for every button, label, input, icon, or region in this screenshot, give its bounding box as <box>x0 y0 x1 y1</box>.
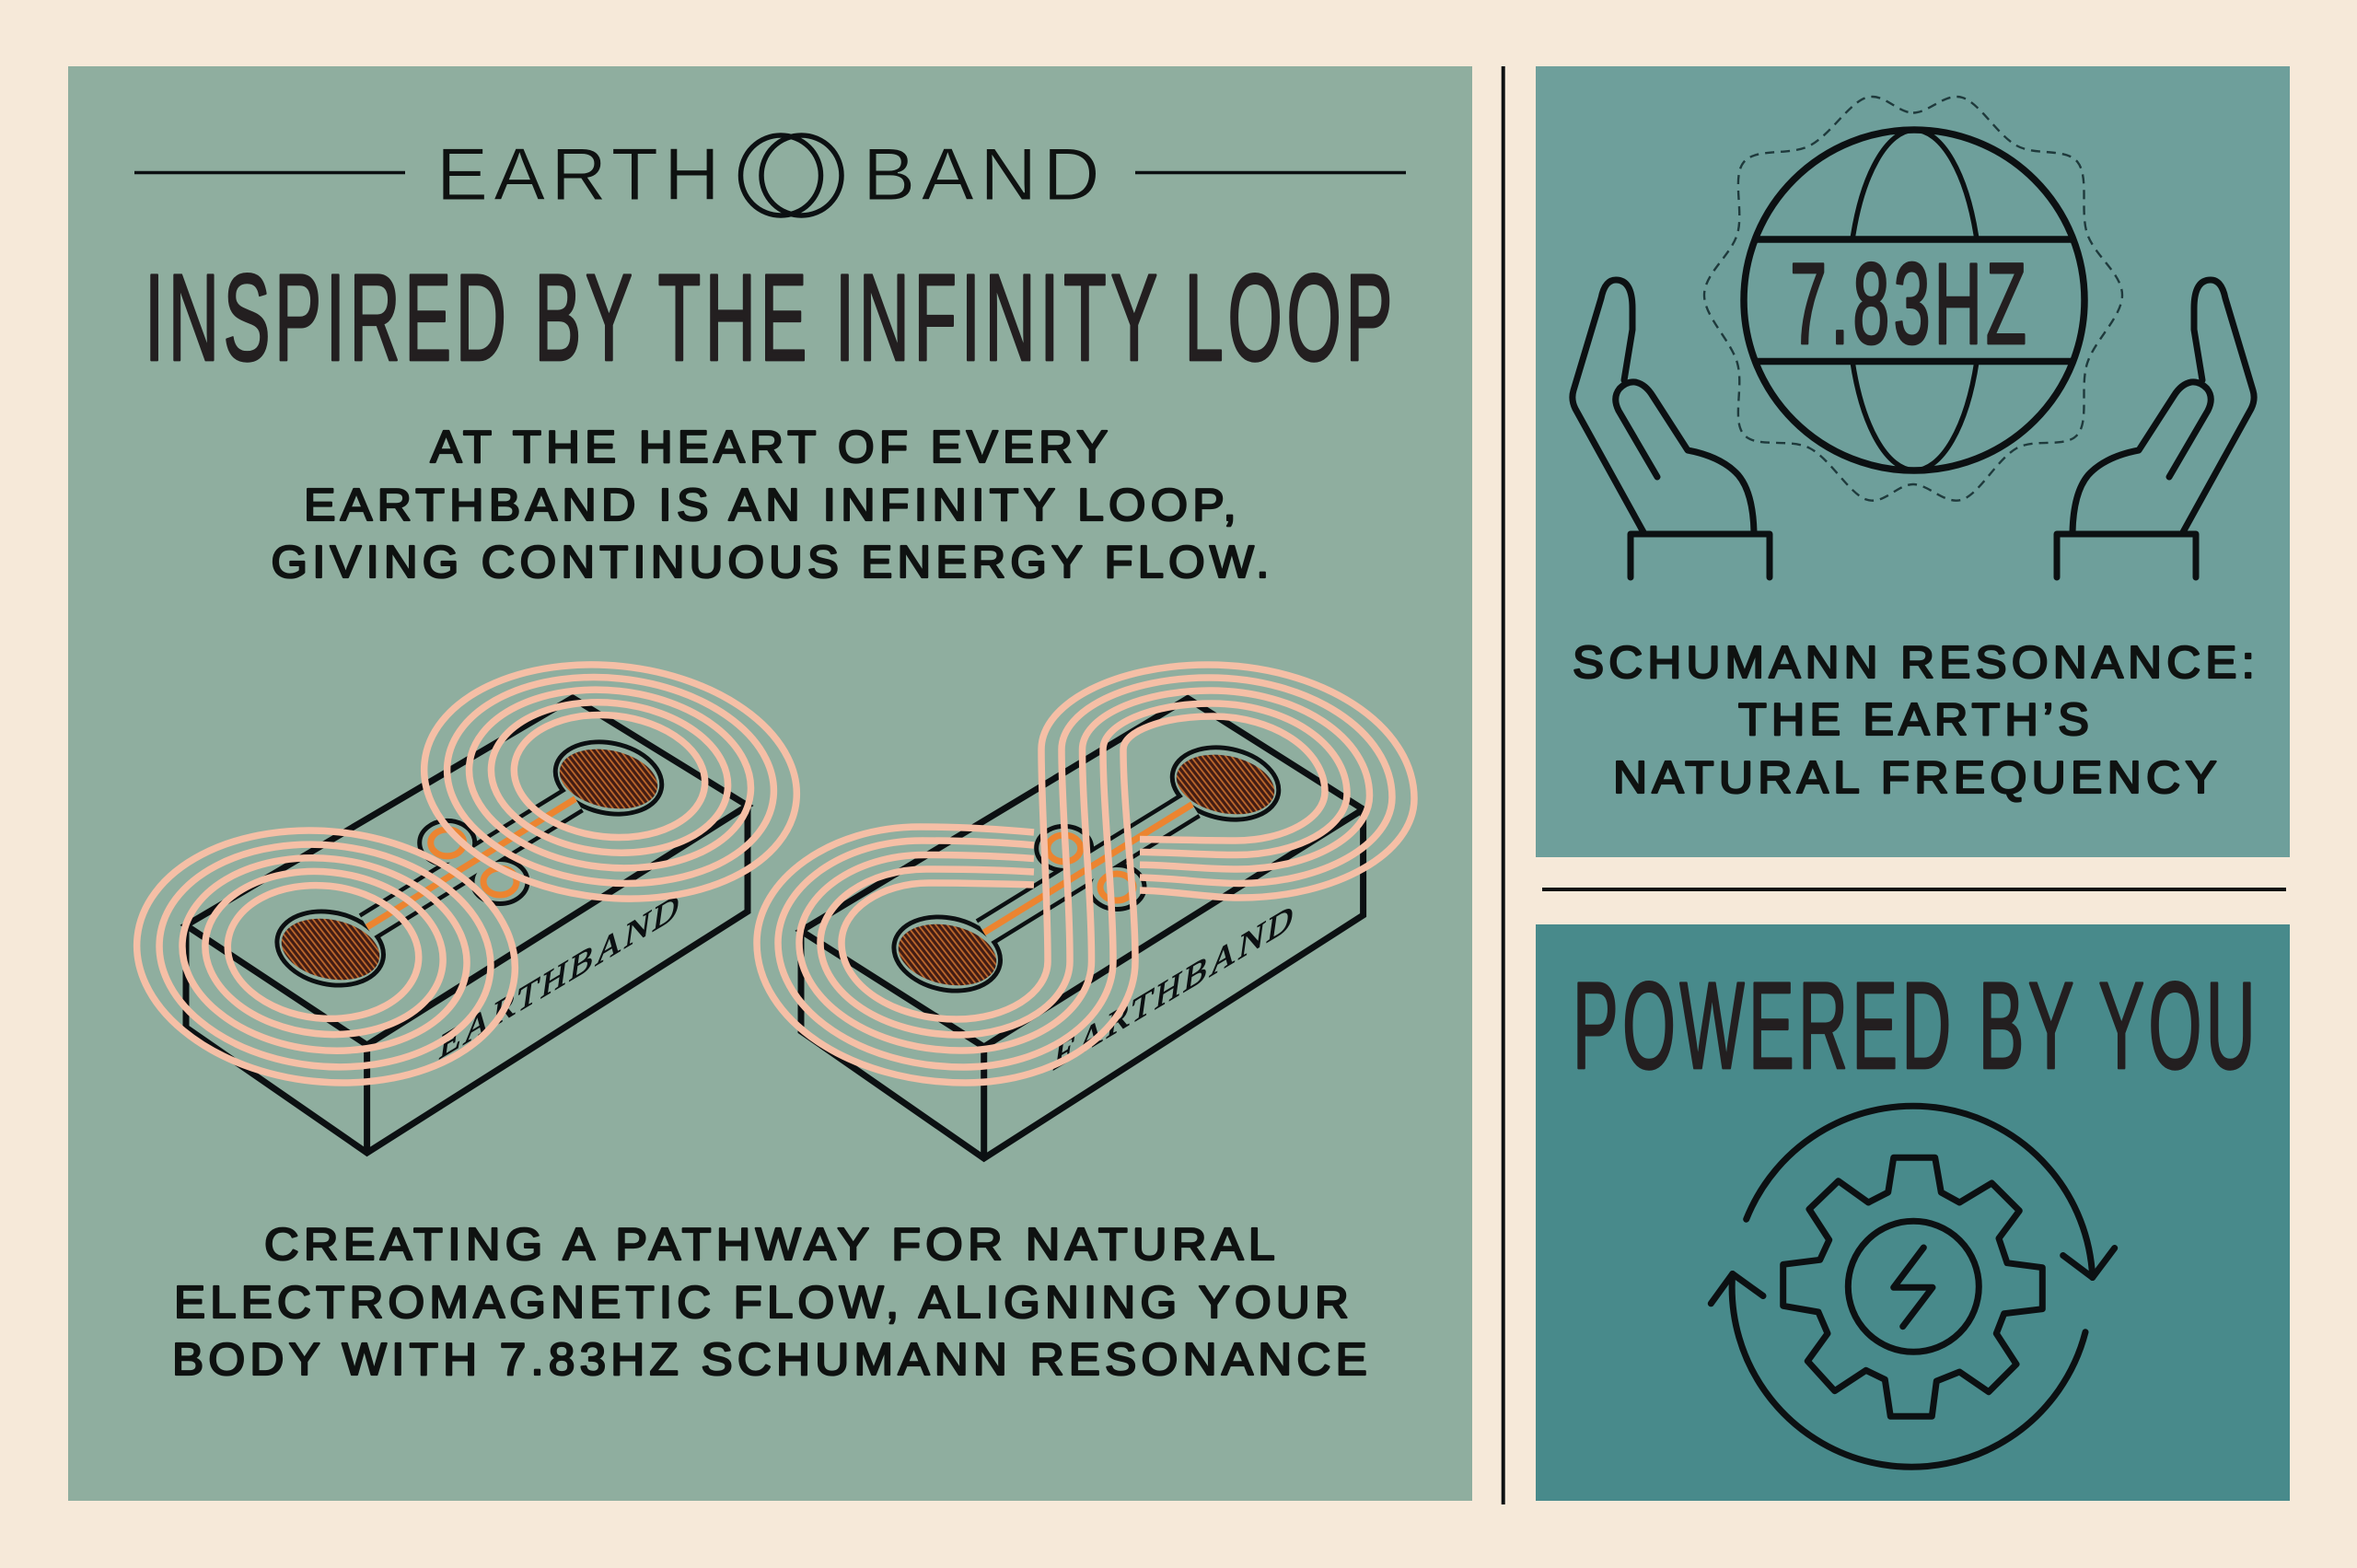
box label: EARTHBAND: EARTHBAND <box>1051 893 1299 1079</box>
field rings: two separate coils <box>124 646 808 1101</box>
text block: intro: EARTHBAND IS AN INFINITY LOOP, <box>304 481 1241 530</box>
icon: left hand <box>1573 280 1770 577</box>
circuit: pads and trace <box>268 730 670 997</box>
text block: closing statement <box>172 1220 1372 1385</box>
logo: Earthband header: BAND <box>863 134 1106 216</box>
panel: infinity loop <box>68 66 1472 1501</box>
text block: closing statement: BODY WITH 7.83HZ SCHUMANN RESONANCE <box>172 1335 1372 1385</box>
icon: globe <box>1744 130 2084 470</box>
text block: intro: GIVING CONTINUOUS ENERGY FLOW. <box>271 538 1274 587</box>
divider: vertical <box>1502 66 1505 1504</box>
heading: inspired by the infinity loop: INSPIRED BY THE INFINITY LOOP <box>145 250 1397 387</box>
text block: Schumann resonance caption: THE EARTH’S <box>1738 695 2094 745</box>
text block: closing statement: CREATING A PATHWAY FOR NATURAL <box>264 1220 1280 1270</box>
box label: EARTHBAND: EARTHBAND <box>437 882 685 1068</box>
circuit: pads and trace <box>885 736 1287 1003</box>
illustration: earthband with separate fields <box>124 646 808 1153</box>
globe label: 7.83HZ: 7.83HZ <box>1790 240 2030 368</box>
text block: intro <box>271 423 1274 587</box>
illustration: earthband with infinity field <box>757 665 1414 1158</box>
divider: horizontal <box>1542 888 2286 891</box>
text block: Schumann resonance caption <box>1573 638 2259 803</box>
panel: Schumann resonance <box>1536 66 2290 857</box>
logo: Earthband header: EARTH <box>436 134 726 216</box>
text block: intro: AT THE HEART OF EVERY <box>431 423 1112 472</box>
panel: powered by you <box>1536 924 2290 1501</box>
box outline <box>801 698 1364 1158</box>
text block: closing statement: ELECTROMAGNETIC FLOW, ALIGNING YOUR <box>174 1278 1353 1328</box>
icon: circular arrows <box>1711 1106 2115 1467</box>
icon: right hand <box>2057 280 2254 577</box>
icon: wavy dashed aura <box>1704 97 2122 501</box>
logo: Earthband header <box>134 134 1406 216</box>
field rings: infinity loop <box>757 665 1414 1083</box>
icon: gear with lightning bolt <box>1783 1157 2042 1416</box>
text block: Schumann resonance caption: NATURAL FREQUENCY <box>1613 753 2222 803</box>
box outline <box>186 698 748 1153</box>
text block: Schumann resonance caption: SCHUMANN RESONANCE: <box>1573 638 2259 688</box>
